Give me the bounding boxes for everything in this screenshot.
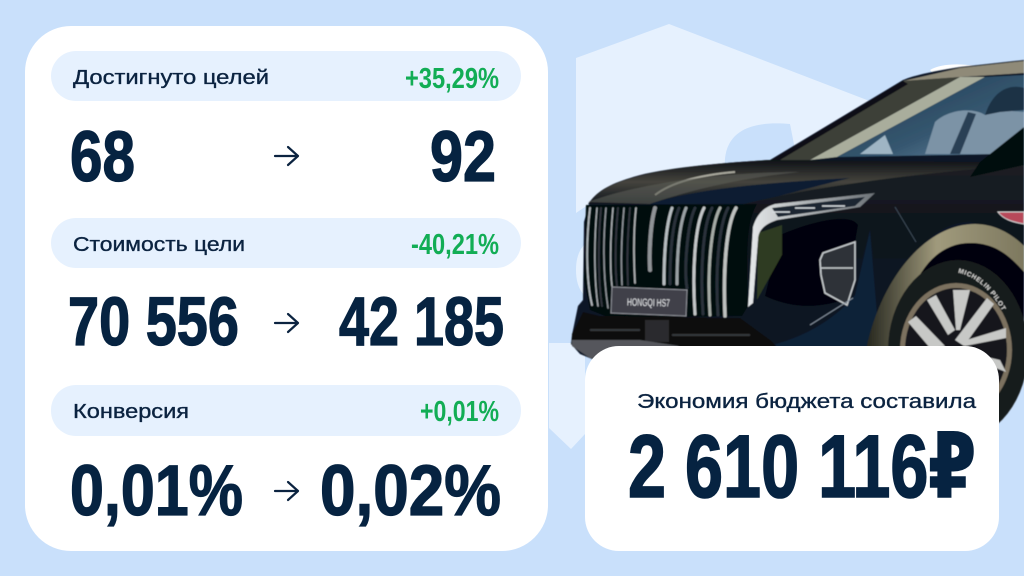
lower bumper <box>572 312 780 360</box>
change percent: +0,01% <box>420 396 499 428</box>
red reflector <box>998 212 1024 224</box>
header pill <box>51 51 521 101</box>
wheel spokes <box>908 290 1006 405</box>
arrow <box>275 482 298 500</box>
headlight strip <box>748 193 875 307</box>
front wheel <box>888 260 1024 424</box>
wheel arch <box>866 224 1024 350</box>
metric: goals reached <box>51 51 521 197</box>
side body panels <box>740 165 1024 350</box>
label: Достигнуто целей <box>73 67 269 89</box>
panel: metrics <box>25 26 548 551</box>
savings label: Экономия бюджета составила <box>637 391 977 413</box>
panel: budget savings <box>585 346 999 551</box>
value before: 70 556 <box>68 283 239 360</box>
value after: 92 <box>430 118 496 197</box>
arrow <box>275 147 298 165</box>
windshield glass <box>837 75 1024 157</box>
metric: cost per goal <box>51 218 521 360</box>
arrow <box>275 314 298 332</box>
change percent: +35,29% <box>405 63 499 95</box>
car body silhouette <box>571 60 1024 359</box>
lower intake <box>765 219 858 306</box>
front wheel: MICHELIN PILOT <box>958 268 1007 310</box>
windshield frame and roof band <box>776 77 960 160</box>
fog lamp <box>810 242 855 325</box>
interior seats <box>925 110 1024 154</box>
grille chrome bars <box>587 208 736 316</box>
change percent: -40,21% <box>411 229 499 261</box>
license plate: HONGQI HS7 <box>627 296 670 310</box>
decorative shield shape <box>549 24 975 449</box>
header pill <box>51 385 521 436</box>
label: Конверсия <box>73 401 189 423</box>
value before: 0,01% <box>70 452 243 531</box>
value after: 42 185 <box>339 283 504 360</box>
light pillar strip <box>810 77 985 160</box>
license plate <box>611 287 687 316</box>
hood <box>588 160 987 204</box>
car photo: Hongqi HS7 <box>570 59 1024 424</box>
value after: 0,02% <box>320 452 501 531</box>
grille <box>584 204 757 318</box>
value before: 68 <box>70 118 135 197</box>
metric: conversion <box>51 385 521 531</box>
label: Стоимость цели <box>73 234 245 256</box>
header pill <box>51 218 521 268</box>
